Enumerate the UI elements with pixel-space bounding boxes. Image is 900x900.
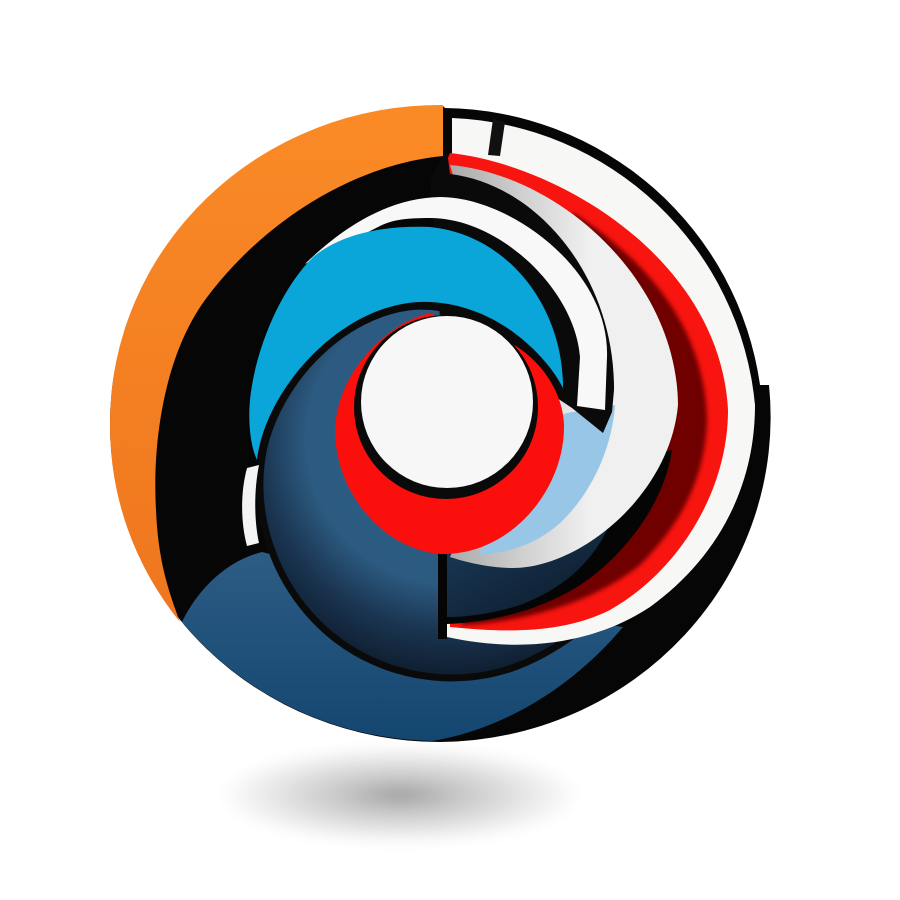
outer white band (447, 118, 755, 645)
emblem (110, 105, 771, 742)
navy disc with black rim (260, 306, 620, 678)
navy pit (447, 530, 607, 617)
dark gap behind pale crescent (447, 450, 672, 624)
pale crescent (450, 165, 678, 568)
cyan crescent (249, 227, 563, 460)
dark red shading (447, 212, 707, 625)
navy disc rim, upper (420, 306, 563, 396)
black inner arc and tip (430, 150, 614, 433)
light blue crescent (480, 405, 615, 555)
center white disc (361, 316, 533, 488)
ground shadow (220, 745, 580, 845)
center ring (354, 315, 538, 499)
orange outer arc (110, 105, 443, 622)
band divider (488, 119, 505, 156)
red inner crescent (335, 313, 564, 554)
inner white band (305, 197, 607, 410)
red crescent (447, 153, 728, 630)
vertical divider (438, 553, 447, 639)
lower blue sweep (182, 552, 623, 741)
small white tab (242, 465, 259, 546)
black base disc (110, 106, 771, 742)
